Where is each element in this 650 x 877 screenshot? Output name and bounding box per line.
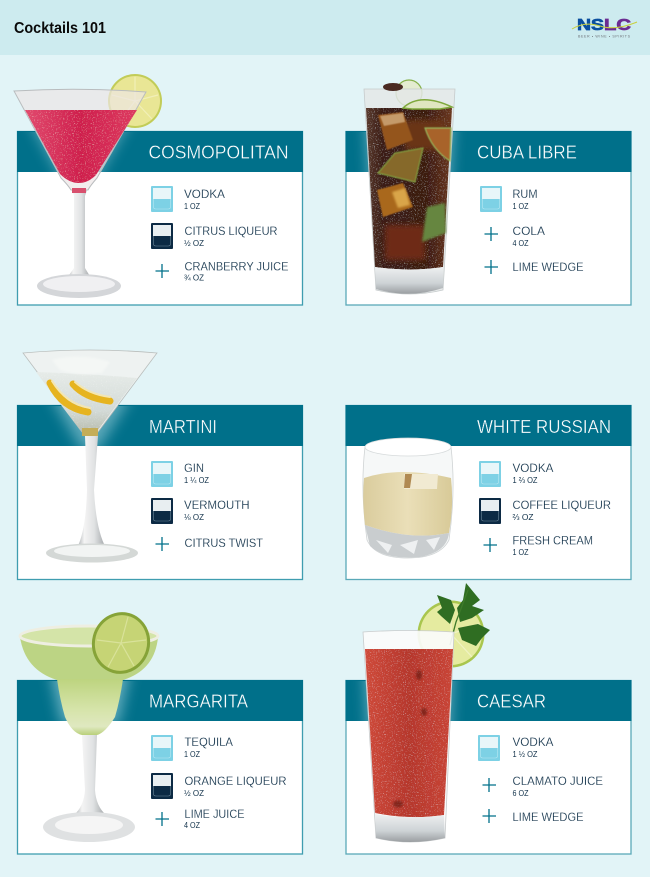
panel: margarita bbox=[17, 670, 303, 854]
glass base bbox=[375, 267, 443, 294]
ingredient: vodka: VODKA bbox=[512, 461, 554, 475]
ice highlight 1 bbox=[380, 113, 405, 126]
drink: cuba libre bbox=[364, 80, 455, 294]
ingredient: rum bbox=[480, 186, 538, 212]
drink: caesar bbox=[363, 583, 490, 842]
lime top wedge bbox=[403, 100, 452, 109]
ingredient: citrus twist bbox=[156, 536, 263, 551]
rim bbox=[365, 438, 451, 456]
ingredient: lime juice: LIME JUICE bbox=[184, 807, 244, 821]
ingredient: fresh cream bbox=[484, 534, 593, 557]
warm tones bbox=[385, 120, 445, 260]
ice highlight 2 bbox=[392, 188, 410, 208]
top lime slice bbox=[396, 80, 422, 106]
card body bbox=[346, 132, 631, 305]
panel: caesar bbox=[345, 680, 632, 855]
name: WHITE RUSSIAN bbox=[477, 416, 611, 437]
ingredient: lime juice: 4 OZ bbox=[184, 821, 200, 830]
ingredient: cranberry juice: ¾ OZ bbox=[184, 274, 204, 282]
cola bbox=[366, 108, 452, 270]
ingredient: vodka bbox=[478, 735, 554, 761]
header glow bbox=[47, 406, 134, 446]
ingredient: vermouth: ⅛ OZ bbox=[184, 513, 204, 522]
lime piece 2 bbox=[422, 203, 446, 242]
panel: white russian bbox=[346, 405, 632, 580]
ingredient: gin bbox=[151, 461, 209, 487]
stem bbox=[77, 436, 106, 548]
ingredient: lime wedge: LIME WEDGE bbox=[512, 810, 584, 824]
ingredient: citrus twist: CITRUS TWIST bbox=[184, 536, 263, 550]
ingredient: lime wedge bbox=[482, 809, 584, 824]
panel: cosmopolitan bbox=[16, 130, 304, 306]
ingredient: tequila bbox=[151, 735, 234, 761]
ingredient: coffee liqueur bbox=[479, 498, 611, 524]
ingredient: clamato juice bbox=[482, 774, 603, 798]
panel: martini bbox=[17, 395, 303, 580]
header glow bbox=[356, 681, 462, 721]
card body bbox=[346, 680, 631, 854]
header glow bbox=[44, 681, 136, 721]
ingredient: cranberry juice bbox=[156, 260, 288, 282]
header glow bbox=[358, 132, 462, 172]
glass base bbox=[375, 814, 445, 842]
base bbox=[46, 544, 138, 562]
card header bbox=[346, 131, 632, 172]
ingredient: lime juice bbox=[156, 807, 244, 830]
lime slice bbox=[418, 600, 484, 668]
card header bbox=[17, 405, 303, 446]
name: COSMOPOLITAN bbox=[148, 142, 288, 162]
ingredient: tequila: TEQUILA bbox=[184, 735, 234, 749]
lime slice bbox=[85, 606, 157, 680]
salted rim bbox=[20, 626, 158, 646]
ingredient: cola bbox=[484, 224, 546, 248]
lemon twists bbox=[50, 381, 110, 412]
ingredient: rum: RUM bbox=[512, 187, 538, 201]
name: CAESAR bbox=[477, 690, 546, 712]
ingredient: citrus liqueur bbox=[151, 223, 278, 249]
ingredient: rum: 1 OZ bbox=[512, 202, 529, 211]
ingredient: vodka: VODKA bbox=[184, 187, 226, 201]
logo: NSLC bbox=[572, 17, 637, 38]
ingredient: gin: 1 ¼ OZ bbox=[184, 476, 209, 485]
liquid bbox=[36, 372, 137, 436]
ingredient: vodka: 1 ½ OZ bbox=[512, 750, 538, 759]
lime piece 3 bbox=[425, 128, 451, 161]
logo: NSLC: BEER • WINE • SPIRITS bbox=[578, 34, 631, 38]
ice bbox=[52, 356, 110, 374]
juice bbox=[365, 649, 453, 817]
upper bowl bbox=[20, 637, 158, 680]
glass bbox=[363, 630, 454, 842]
ice cubes bbox=[404, 474, 438, 489]
card body bbox=[18, 406, 302, 580]
card header bbox=[17, 131, 303, 172]
ingredient: citrus liqueur: CITRUS LIQUEUR bbox=[184, 224, 278, 238]
lime piece 1 bbox=[378, 148, 423, 182]
ingredient: citrus liqueur: ½ OZ bbox=[184, 239, 204, 248]
stem bbox=[74, 735, 106, 815]
ingredient: orange liqueur bbox=[151, 773, 287, 799]
ingredient: tequila: 1 OZ bbox=[184, 750, 200, 759]
ingredient: coffee liqueur: ⅔ OZ bbox=[512, 513, 534, 522]
logo: NSLC: NS bbox=[577, 17, 604, 34]
drink: white russian bbox=[363, 438, 453, 558]
lime slice bbox=[108, 74, 162, 128]
ingredient: lime wedge: LIME WEDGE bbox=[512, 260, 584, 274]
base bbox=[37, 274, 121, 298]
cream bbox=[363, 472, 452, 536]
title: Cocktails 101 bbox=[14, 20, 106, 37]
ingredient: clamato juice: 6 OZ bbox=[512, 789, 529, 798]
header band bbox=[0, 0, 650, 55]
ingredient: gin: GIN bbox=[184, 461, 204, 475]
logo: NSLC: LC bbox=[604, 17, 632, 34]
neck bbox=[82, 428, 98, 436]
name: MARGARITA bbox=[149, 690, 249, 712]
ice cube 1 bbox=[378, 112, 413, 150]
ice cube 2 bbox=[377, 183, 413, 217]
name: CUBA LIBRE bbox=[477, 142, 577, 162]
bowl bbox=[23, 350, 157, 432]
ingredient: clamato juice: CLAMATO JUICE bbox=[512, 774, 603, 788]
stem bbox=[67, 190, 91, 278]
ingredient: cola: COLA bbox=[512, 224, 546, 238]
glass bbox=[364, 89, 455, 294]
neck tint bbox=[72, 188, 86, 193]
drink: margarita bbox=[20, 606, 158, 842]
ingredient: cola: 4 OZ bbox=[512, 239, 529, 248]
bowl bbox=[14, 89, 146, 190]
ingredient: vodka bbox=[479, 461, 554, 487]
ingredient: vodka: 1 OZ bbox=[184, 202, 200, 211]
panel: cuba libre bbox=[345, 130, 632, 306]
sediment bbox=[393, 670, 427, 808]
header glow bbox=[26, 132, 133, 172]
ingredient: vodka: 1 ⅔ OZ bbox=[512, 476, 538, 485]
drink: martini bbox=[23, 350, 157, 562]
ingredient: cranberry juice: CRANBERRY JUICE bbox=[184, 260, 288, 274]
base bbox=[43, 812, 135, 842]
glass bbox=[363, 438, 453, 558]
crystal base bbox=[365, 525, 449, 558]
ingredient: fresh cream: 1 OZ bbox=[512, 548, 529, 557]
card body bbox=[346, 406, 631, 580]
liquid bbox=[25, 110, 137, 183]
ingredient: vodka bbox=[151, 186, 226, 212]
ingredient: orange liqueur: ½ OZ bbox=[184, 789, 204, 798]
card body bbox=[18, 680, 302, 854]
ingredient: vermouth bbox=[151, 498, 250, 524]
ingredient: orange liqueur: ORANGE LIQUEUR bbox=[184, 774, 287, 788]
parsley garnish bbox=[437, 583, 490, 646]
ingredient: vodka: VODKA bbox=[512, 735, 554, 749]
ingredient: vermouth: VERMOUTH bbox=[184, 498, 250, 512]
card header bbox=[17, 680, 303, 721]
drink: cosmopolitan bbox=[14, 74, 162, 298]
ingredient: lime wedge bbox=[484, 260, 584, 274]
floating ice bbox=[383, 83, 403, 91]
card header bbox=[346, 405, 632, 446]
ingredient: fresh cream: FRESH CREAM bbox=[512, 534, 593, 548]
card body bbox=[18, 132, 302, 305]
card header bbox=[346, 680, 632, 721]
lower bowl bbox=[57, 679, 123, 735]
name: MARTINI bbox=[149, 416, 217, 437]
ingredient: coffee liqueur: COFFEE LIQUEUR bbox=[512, 498, 611, 512]
